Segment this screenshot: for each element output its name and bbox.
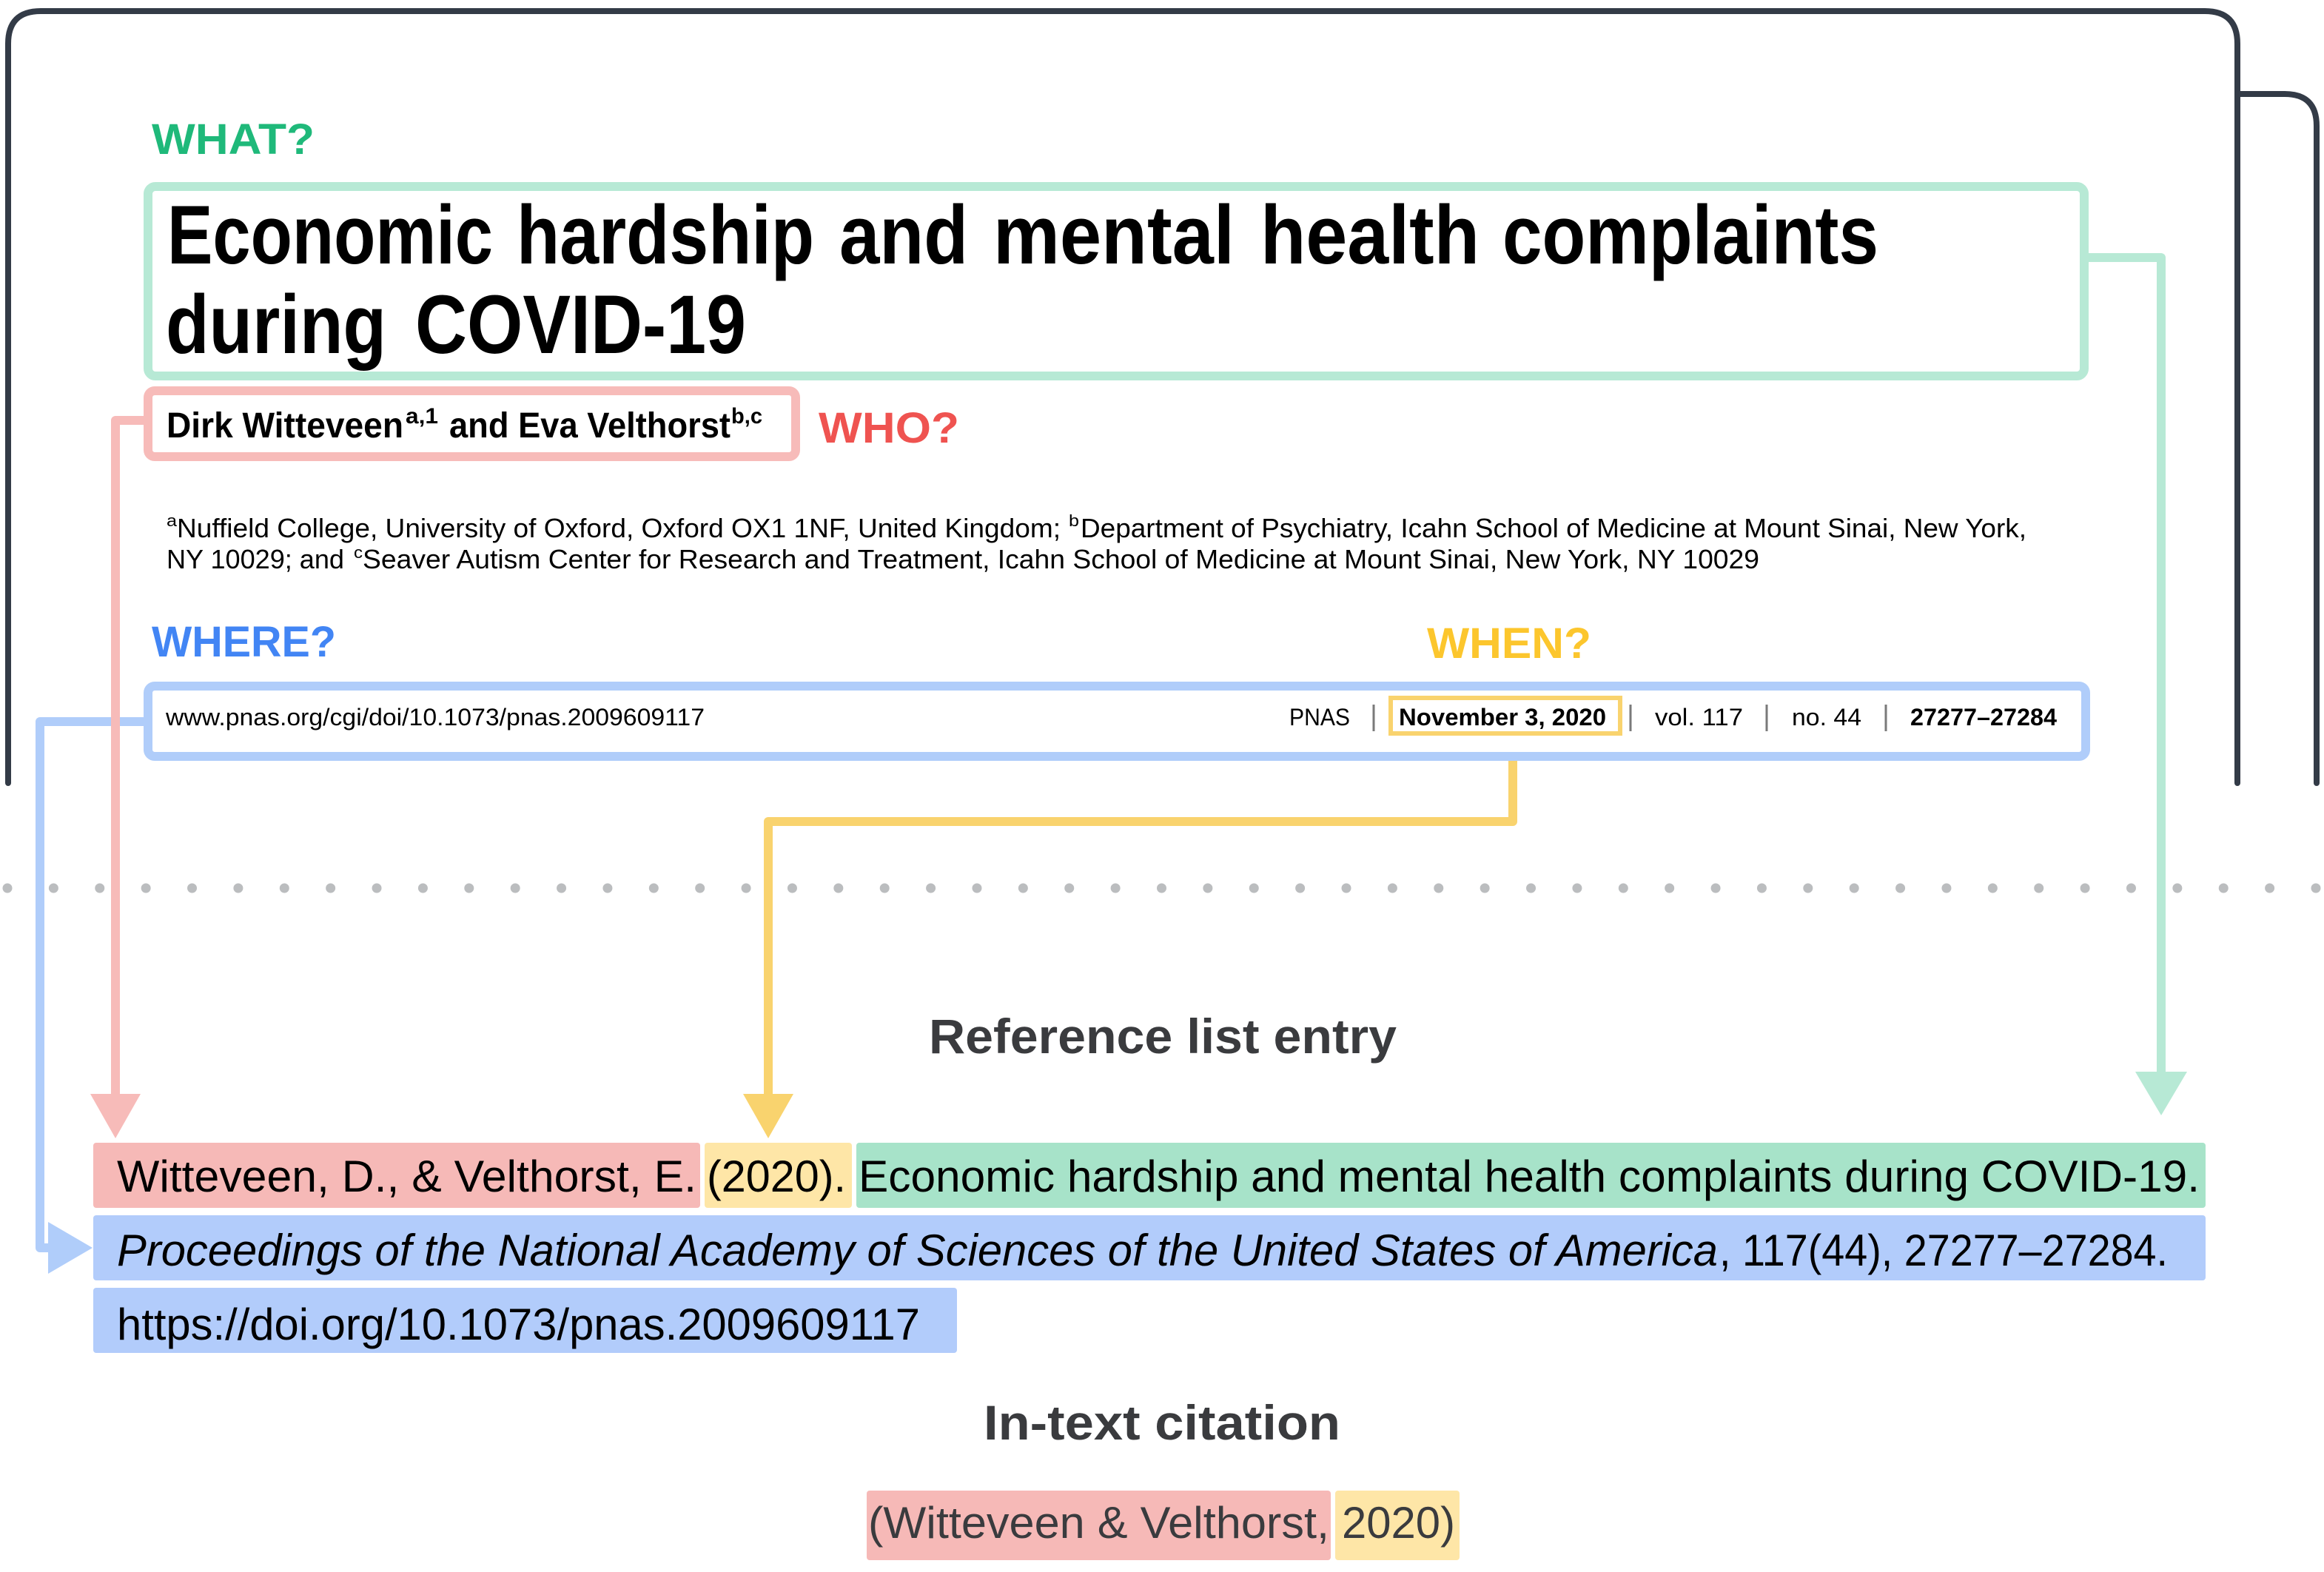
authors text: b,c [731, 404, 762, 429]
article title: complaints [1502, 189, 1878, 281]
paper sheet outlines [8, 11, 2317, 783]
heading: in-text citation: In-text citation [984, 1395, 1340, 1450]
reference list entry [93, 1143, 2206, 1353]
year highlight: (2020). [707, 1152, 846, 1201]
authors text: a,1 [406, 404, 438, 429]
article title [166, 189, 1878, 371]
citation year [1335, 1491, 1460, 1560]
label: where: WHERE? [152, 618, 336, 666]
in-text citation [867, 1491, 1460, 1560]
authors text: and Eva Velthorst [449, 406, 731, 446]
authors text [167, 404, 762, 446]
issue: no. 44 [1792, 704, 1861, 730]
doi url: www.pnas.org/cgi/doi/10.1073/pnas.2009609117 [165, 704, 705, 730]
article title: COVID-19 [415, 278, 746, 371]
label: when: WHEN? [1427, 619, 1591, 668]
separators [1374, 705, 1886, 731]
journal highlight: Proceedings of the National Academy of Sciences of the United States of America [117, 1226, 1718, 1275]
heading: reference list entry: Reference list entry [929, 1009, 1397, 1064]
title highlight: Economic hardship and mental health complaints during COVID-19. [859, 1152, 2200, 1201]
arrow: what to reference [2083, 258, 2187, 1115]
pages: 27277–27284 [1910, 704, 2057, 730]
affiliations [167, 511, 2026, 574]
doi highlight: https://doi.org/10.1073/pnas.2009609117 [117, 1300, 920, 1349]
label: what: WHAT? [152, 115, 315, 164]
affiliations: Nuffield College, University of Oxford, Oxford OX1 1NF, United Kingdom; [177, 513, 1061, 543]
authors highlight: Witteveen, D., & Velthorst, E. [117, 1152, 696, 1201]
arrow: who to reference [90, 420, 148, 1138]
affiliations: Seaver Autism Center for Research and Treatment, Icahn School of Medicine at Mount Sinai, New York, NY 10029 [363, 544, 1759, 574]
citation authors [867, 1491, 1331, 1560]
journal name: PNAS [1289, 704, 1350, 730]
label: who: WHO? [819, 404, 959, 452]
date box [1391, 698, 1620, 733]
affiliations: c [354, 543, 363, 562]
article title: during [166, 278, 386, 371]
arrow: when to reference [743, 733, 1513, 1138]
article title: and [839, 189, 968, 281]
affiliations: b [1069, 511, 1079, 530]
affiliations: NY 10029; and [167, 544, 344, 574]
arrow: where to reference [40, 722, 145, 1274]
date box: November 3, 2020 [1399, 704, 1606, 730]
citation year: 2020) [1342, 1498, 1455, 1548]
affiliations: Department of Psychiatry, Icahn School of Medicine at Mount Sinai, New York, [1081, 513, 2026, 543]
volume: vol. 117 [1655, 704, 1743, 730]
article title: Economic [167, 189, 493, 281]
journal highlight: , 117(44), 27277–27284. [1719, 1226, 2168, 1275]
title box [148, 187, 2084, 376]
authors text: Dirk Witteveen [167, 406, 403, 446]
article title: health [1260, 189, 1480, 281]
authors box [148, 391, 796, 457]
article title: hardship [517, 189, 814, 281]
dotted divider [7, 884, 2320, 893]
journal highlight [93, 1215, 2206, 1280]
journal info box [148, 686, 2086, 756]
affiliations: a [167, 511, 178, 530]
citation authors: (Witteveen & Velthorst, [868, 1498, 1329, 1548]
article title: mental [993, 189, 1235, 281]
